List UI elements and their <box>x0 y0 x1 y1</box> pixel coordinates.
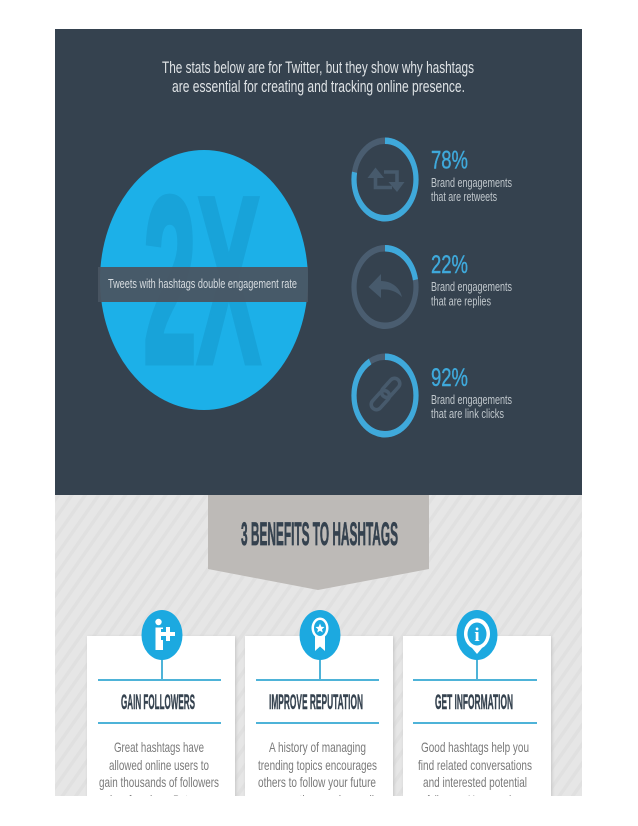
panel: benefits section <box>55 495 582 808</box>
card text: followers. You can also <box>427 792 521 808</box>
card text: allowed online users to <box>109 757 209 773</box>
intro text: are essential for creating and tracking online presence. <box>172 78 465 96</box>
stat: 92% link clicks: Brand engagements <box>431 393 512 407</box>
card text: trending topics encourages <box>258 757 377 773</box>
card text: Great hashtags have <box>114 739 204 755</box>
intro text <box>162 59 474 96</box>
icon: retweet <box>368 168 404 192</box>
stat: 92% link clicks: that are link clicks <box>431 407 504 421</box>
intro text: The stats below are for Twitter, but they show why hashtags <box>162 59 474 77</box>
card: gain followers: GAIN FOLLOWERS <box>121 691 195 714</box>
icon: person plus pin <box>142 610 182 660</box>
card text <box>418 742 532 796</box>
card: get information <box>403 610 552 808</box>
stat: 78% retweets: 78% <box>431 146 468 174</box>
card text: new creations and overall <box>258 792 374 808</box>
card: improve reputation <box>245 610 394 808</box>
stat: 22% replies: Brand engagements <box>431 280 512 294</box>
banner: 3 benefits to hashtags <box>208 495 429 590</box>
card: get information: GET INFORMATION <box>435 691 513 714</box>
panel: dark stats section <box>55 29 582 495</box>
stat: 78% retweets <box>354 141 512 218</box>
card text: A history of managing <box>269 739 366 755</box>
stat: 22% replies: that are replies <box>431 294 491 308</box>
card text <box>258 742 377 796</box>
chart: 2X blue circle: 2X <box>143 147 261 414</box>
chart: 2X blue circle <box>98 147 308 414</box>
icon: info pin: i <box>474 625 480 646</box>
card text <box>99 742 219 796</box>
card text: in a few days. Put your <box>110 792 210 808</box>
icon: ribbon award pin <box>300 610 340 660</box>
card: gain followers <box>87 610 236 808</box>
icon: reply arrow <box>368 274 402 298</box>
stat: 78% retweets: that are retweets <box>431 190 497 204</box>
card: improve reputation: IMPROVE REPUTATION <box>269 691 363 714</box>
stat: 92% link clicks <box>354 357 512 434</box>
stat: 22% replies: 22% <box>431 251 468 279</box>
card text: find related conversations <box>418 757 532 773</box>
stat: 78% retweets: Brand engagements <box>431 176 512 190</box>
card text: Good hashtags help you <box>421 739 529 755</box>
card text: others to follow your future <box>258 774 376 790</box>
card text: gain thousands of followers <box>99 774 219 790</box>
card text: and interested potential <box>423 774 527 790</box>
icon: info pin <box>456 610 498 660</box>
stat: 22% replies <box>354 248 512 326</box>
stat: 92% link clicks: 92% <box>431 364 468 392</box>
chart: 2X blue circle: Tweets with hashtags double engagement rate <box>108 276 297 291</box>
icon: chain link <box>369 376 402 412</box>
